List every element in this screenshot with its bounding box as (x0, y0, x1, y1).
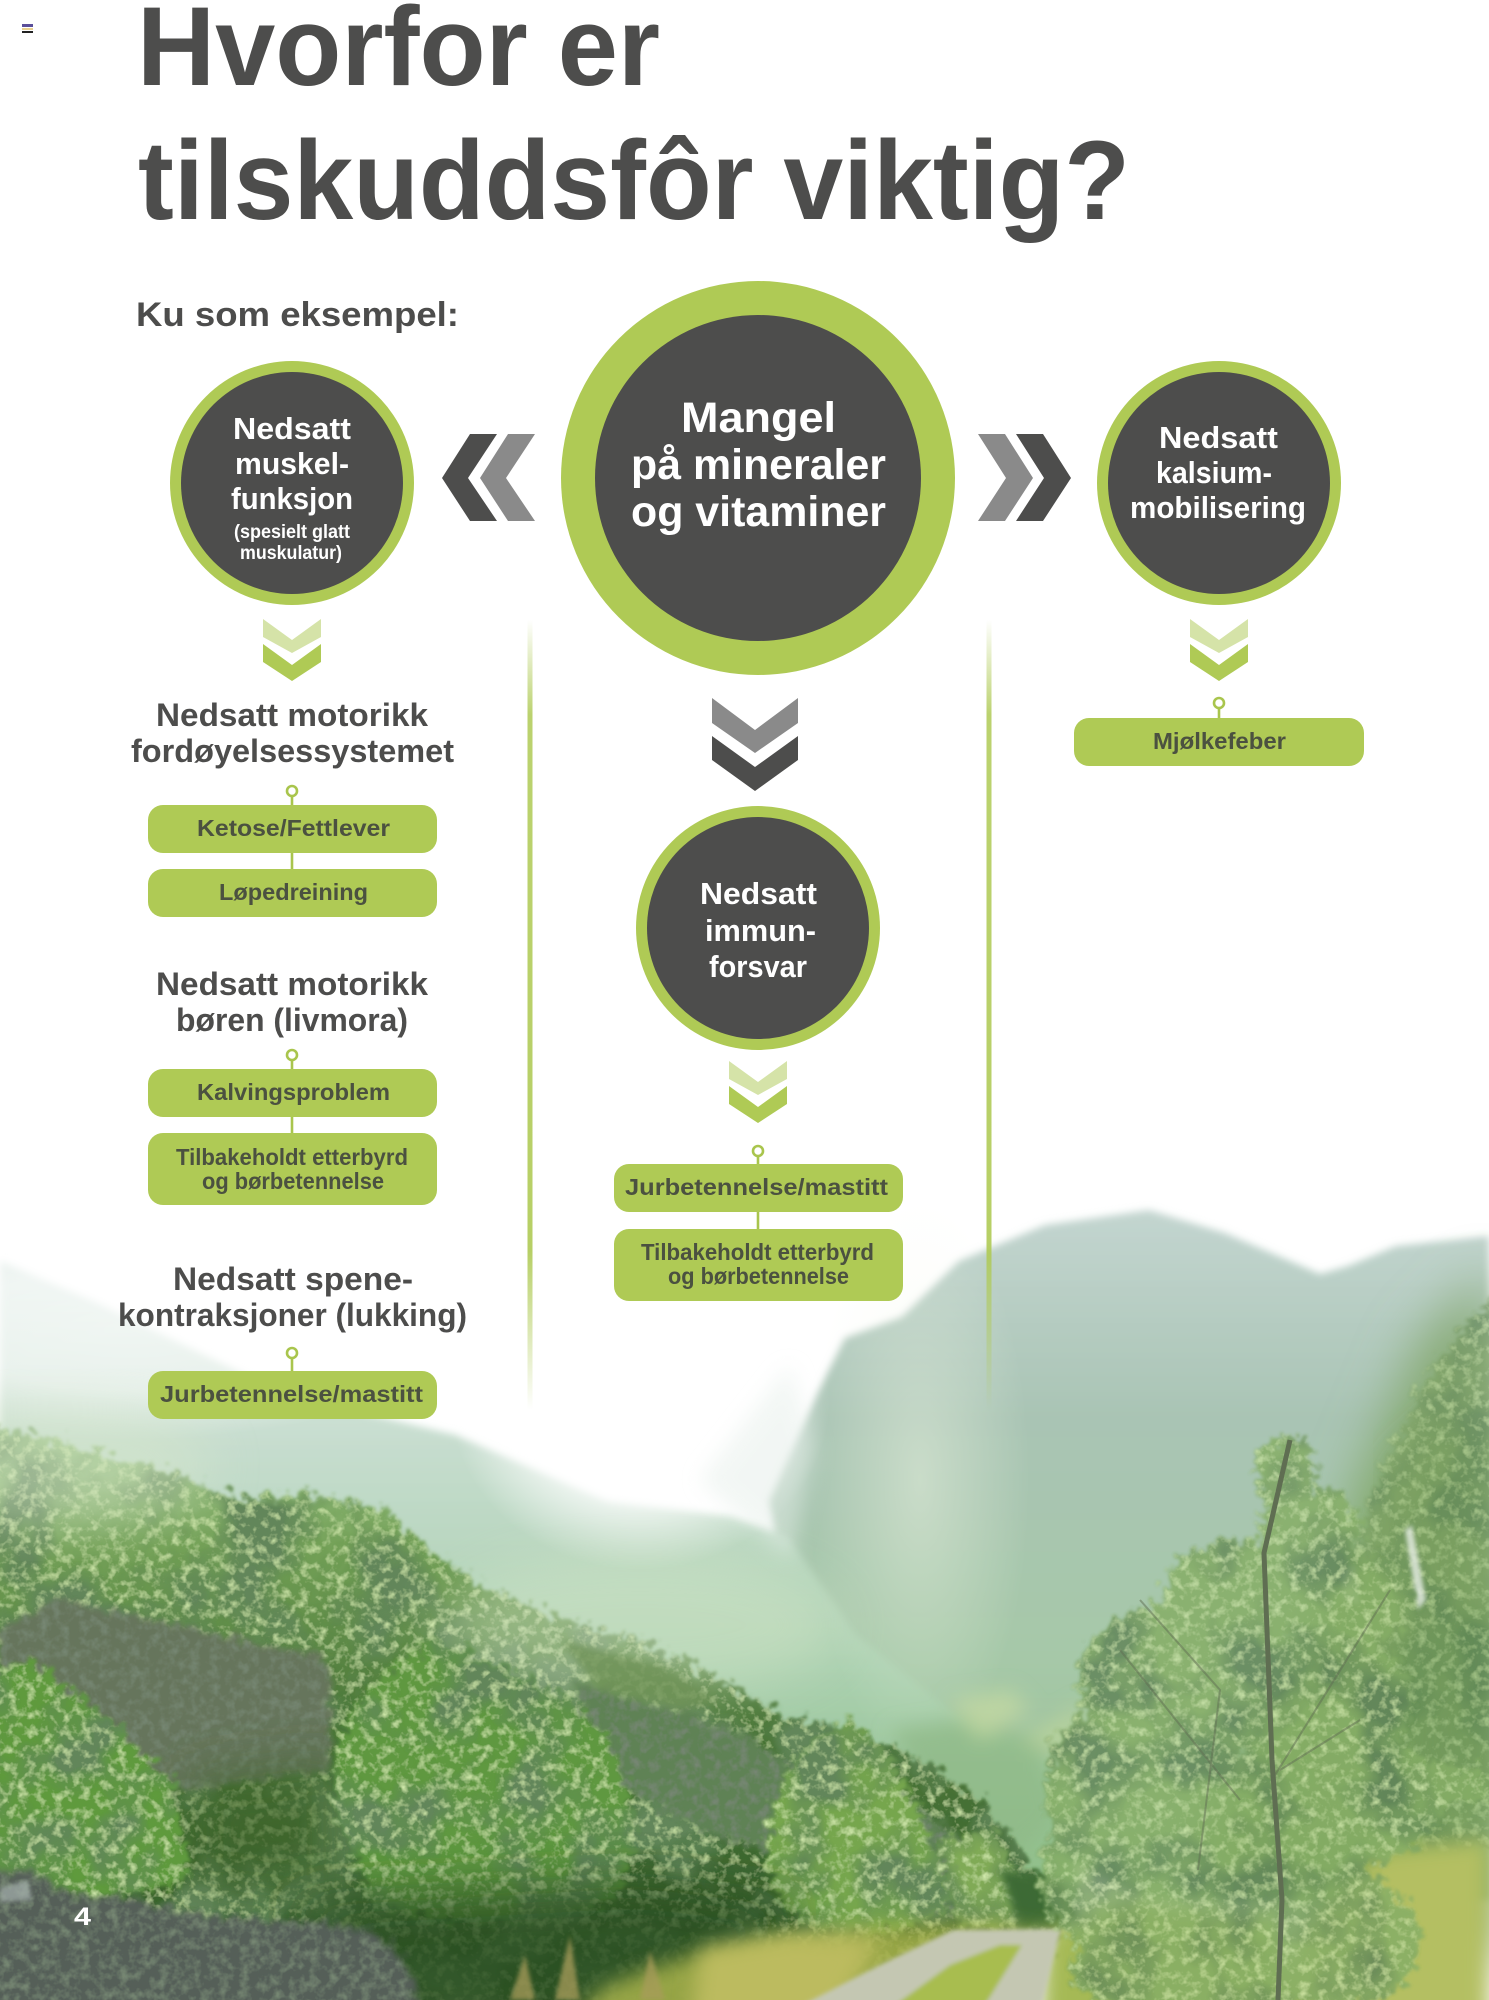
title (137, 0, 1130, 243)
centre circle: immune defence: immun- (705, 913, 816, 948)
panel: immune outcomes: og børbetennelse (668, 1263, 849, 1289)
main circle: deficiency: på mineraler (631, 441, 886, 489)
main circle: deficiency (561, 281, 955, 675)
panel: digestive motor function: Nedsatt motorikk (156, 697, 428, 733)
right circle: calcium mobilisation: kalsium- (1156, 455, 1272, 490)
panel: digestive motor function (131, 697, 454, 917)
panel: immune outcomes: Jurbetennelse/mastitt (625, 1174, 888, 1200)
panel: immune outcomes: Tilbakeholdt etterbyrd (641, 1239, 874, 1265)
left circle: muscle function: muskulatur) (240, 543, 342, 564)
title: tilskuddsfôr viktig? (138, 118, 1130, 243)
panel: digestive motor function: Ketose/Fettlever (197, 815, 390, 841)
panel: uterus motor function: børen (livmora) (176, 1002, 408, 1038)
panel: digestive motor function: fordøyelsessystemet (131, 733, 454, 769)
panel: teat contraction: Jurbetennelse/mastitt (160, 1381, 423, 1407)
panel: digestive motor function: Løpedreining (219, 879, 368, 905)
arrow: right double chevron (978, 434, 1071, 521)
main circle: deficiency: og vitaminer (631, 488, 886, 536)
vertical divider lines (528, 620, 992, 1410)
left circle: muscle function: funksjon (231, 481, 353, 516)
centre circle: immune defence (636, 806, 880, 1050)
arrow: lime chevrons left column (263, 619, 321, 681)
panel: uterus motor function: Nedsatt motorikk (156, 966, 428, 1002)
right circle: calcium mobilisation: Nedsatt (1159, 420, 1278, 455)
subheading: Ku som eksempel: (136, 296, 459, 334)
panel: uterus motor function: og børbetennelse (202, 1168, 384, 1194)
right circle: calcium mobilisation: mobilisering (1130, 490, 1306, 525)
arrow: lime chevrons right column (1190, 619, 1248, 681)
main circle: deficiency: Mangel (681, 394, 836, 442)
panel: uterus motor function (148, 966, 437, 1205)
right circle: calcium mobilisation (1097, 361, 1341, 605)
centre circle: immune defence: forsvar (709, 949, 807, 984)
panel: milk fever outcome (1074, 698, 1364, 766)
panel: immune outcomes (614, 1146, 903, 1301)
panel: uterus motor function: Kalvingsproblem (197, 1079, 390, 1105)
background photo: misty mountain valley with road (0, 1180, 1489, 2000)
panel: uterus motor function: Tilbakeholdt etterbyrd (176, 1144, 408, 1170)
left circle: muscle function: Nedsatt (233, 411, 351, 446)
panel: teat contraction: kontraksjoner (lukking) (118, 1297, 467, 1333)
panel: teat contraction: Nedsatt spene- (173, 1261, 413, 1297)
page number: 4 (74, 1903, 91, 1931)
left circle: muscle function: (spesielt glatt (234, 522, 351, 543)
left circle: muscle function: muskel- (235, 446, 349, 481)
panel: teat contraction (118, 1261, 467, 1419)
small colour bar icon (22, 24, 33, 33)
arrow: lime chevrons centre column (729, 1061, 787, 1123)
centre circle: immune defence: Nedsatt (700, 876, 817, 911)
arrow: left double chevron (442, 434, 535, 521)
arrow: grey chevrons centre column (712, 698, 798, 791)
left circle: muscle function (170, 361, 414, 605)
panel: milk fever outcome: Mjølkefeber (1153, 728, 1286, 754)
